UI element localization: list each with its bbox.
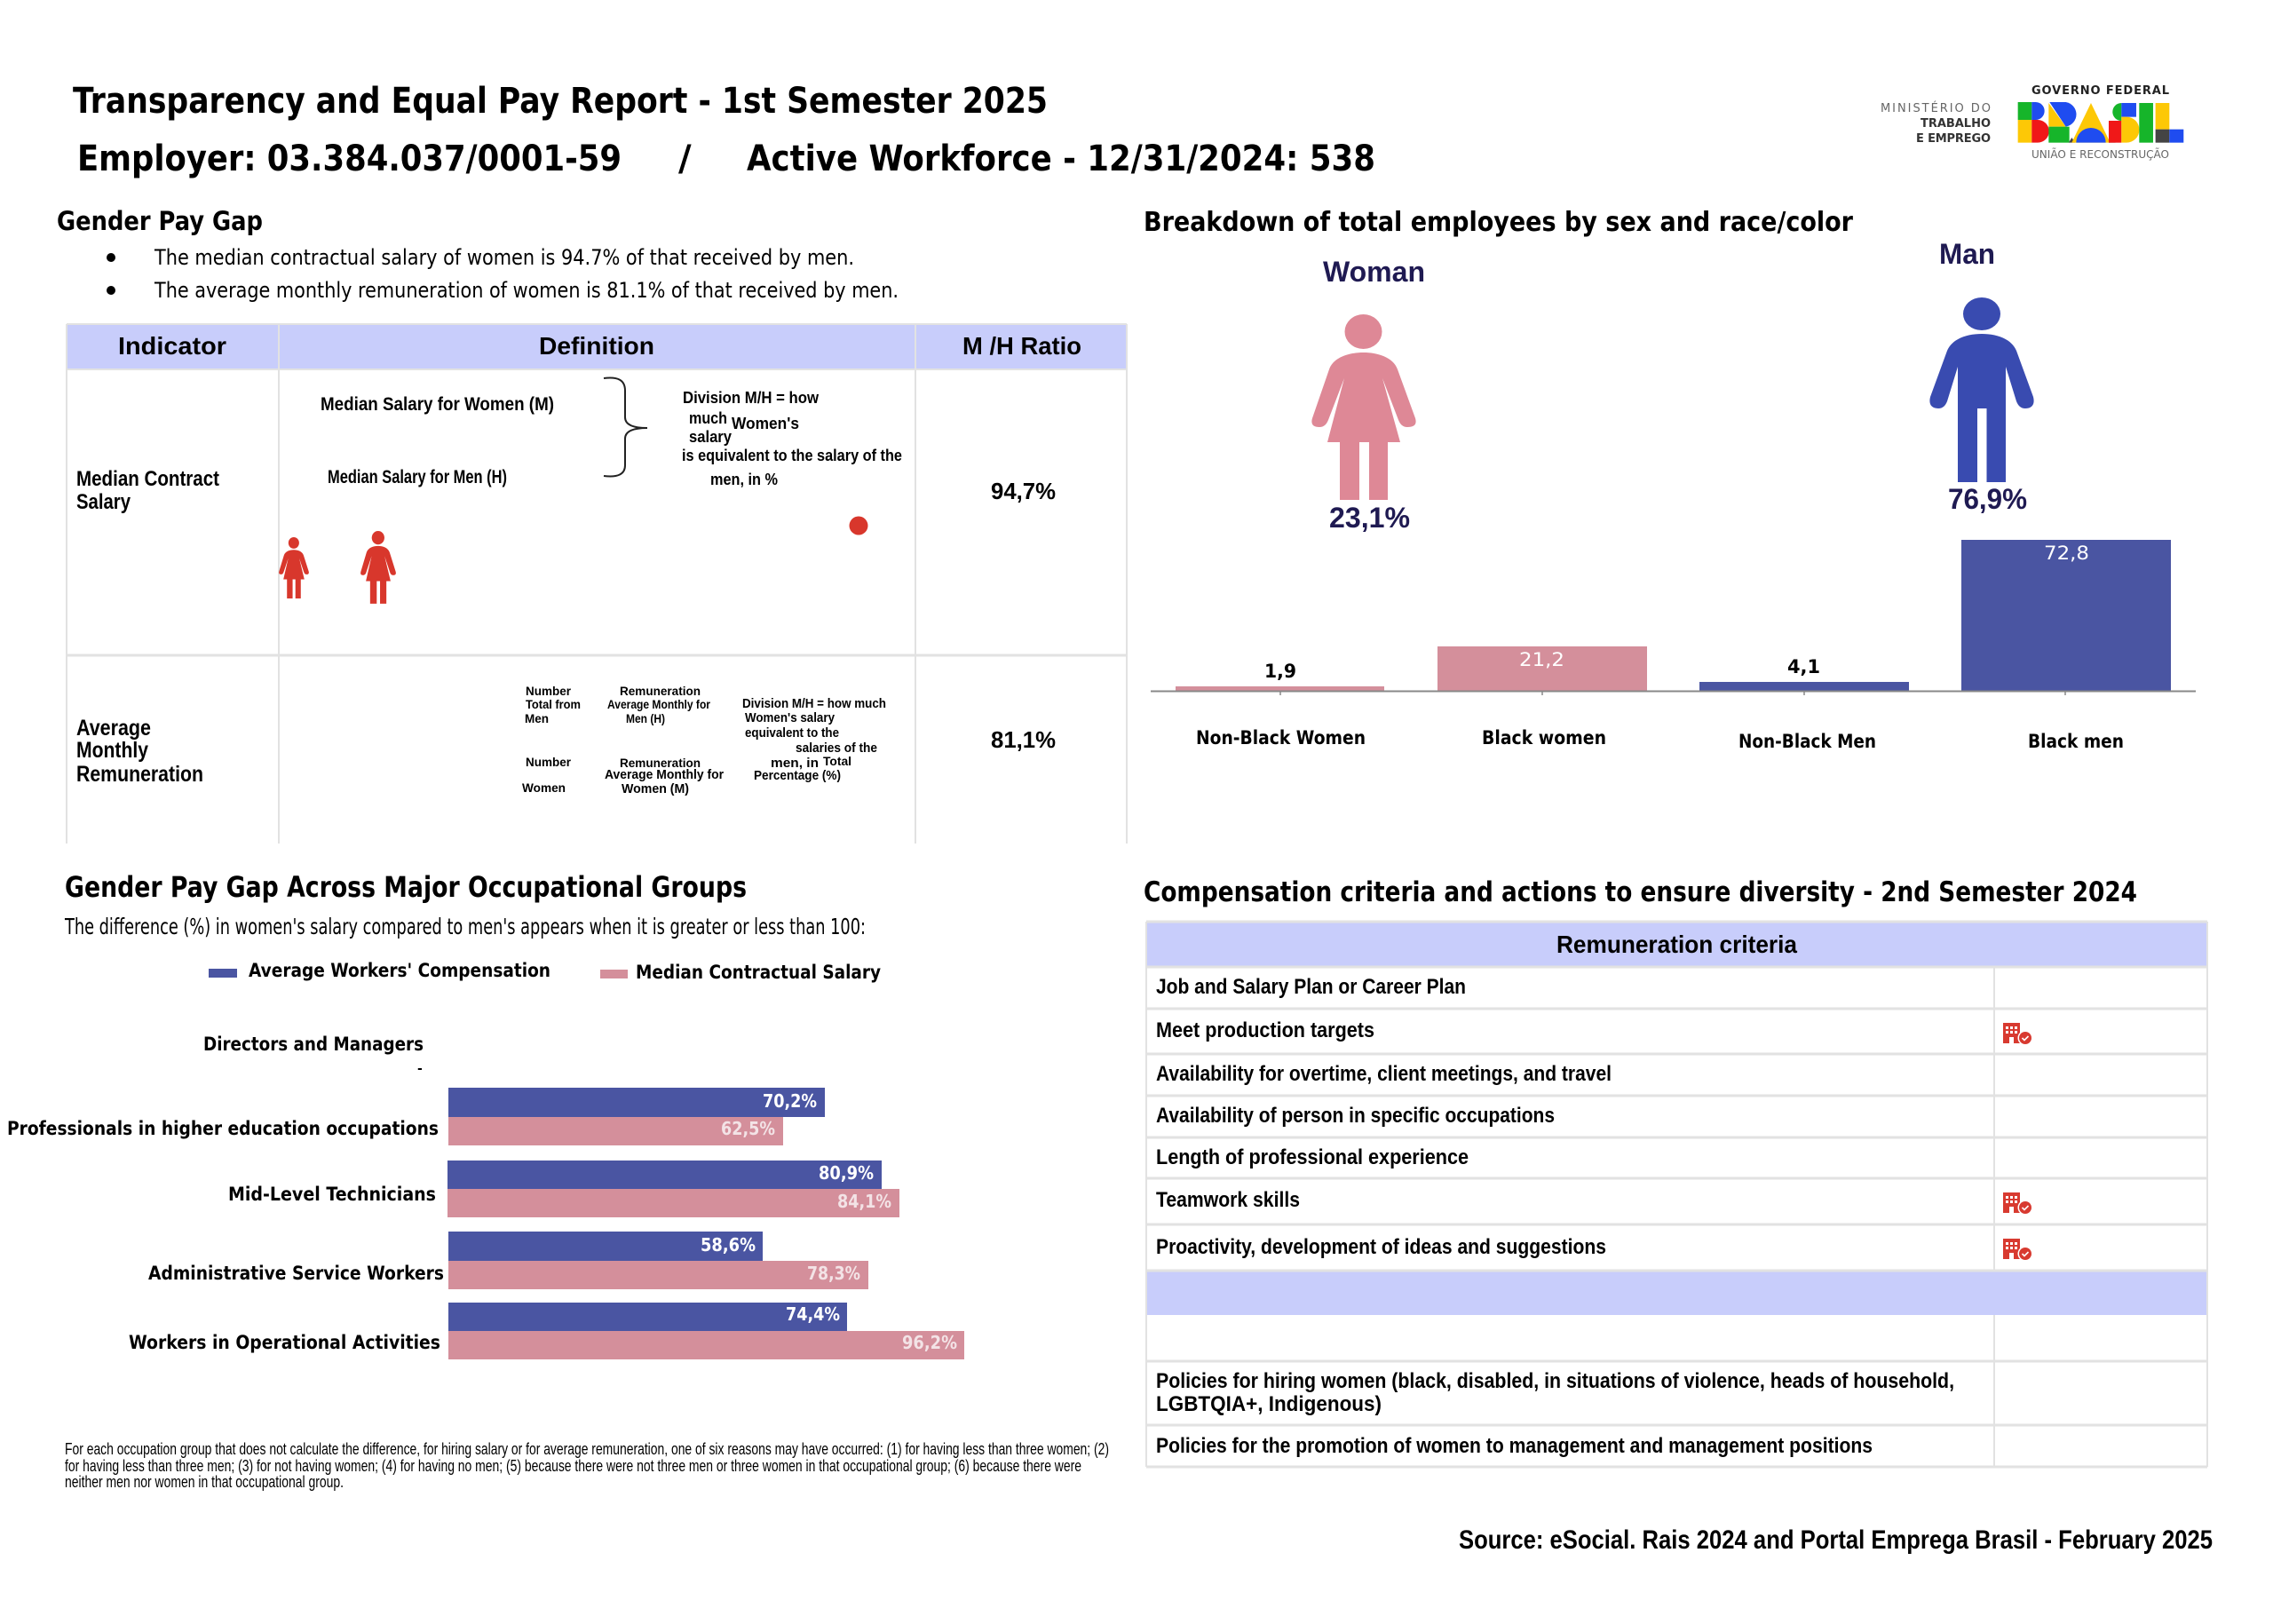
table header labels: M /H Ratio [962,332,1081,360]
table header labels [118,332,1081,360]
division note [682,389,902,488]
report title: Employer: 03.384.037/0001-59 [77,139,622,179]
formula text: Total [823,754,851,768]
bullet list [107,245,899,303]
report title: Active Workforce - 12/31/2024: 538 [747,139,1375,179]
bar chart: employees by category: Non-Black Women [1196,727,1366,749]
criteria rows: Meet production targets [1156,1018,1374,1042]
table header label: Remuneration criteria [1556,931,1797,958]
division note: Women's [732,415,799,432]
man figure with share [1929,238,2034,515]
report title: / [678,139,692,179]
formula text: Number [526,755,572,769]
formula text: Women's salary [745,710,836,725]
bullet list: The average monthly remuneration of women is 81.1% of that received by men. [154,278,899,303]
footnote [65,1439,1109,1491]
bar chart: employees by category: Non-Black Men [1738,731,1876,752]
icon: building check, production targets [2003,1023,2033,1046]
icon: red dot [849,517,868,535]
panel: pay gap by occupational group [7,870,1109,1491]
division note: salary [689,428,732,446]
subheading: The difference (%) in women's salary compared to men's appears when it is greater or less than 100: [64,914,866,939]
woman figure with share: Woman [1323,256,1425,288]
division note: Division M/H = how [683,389,820,407]
criteria rows: Length of professional experience [1156,1145,1469,1169]
group: professionals: Professionals in higher education occupations [7,1118,439,1139]
table header labels: Indicator [118,332,226,360]
row: average monthly remuneration: Remuneration [76,762,203,787]
formula text: Average Monthly for [605,767,724,782]
panel: gender pay gap [57,206,1127,844]
ministry and government logo: E EMPREGO [1916,132,1991,146]
man figure with share: Man [1939,238,1995,270]
criteria rows: Policies for the promotion of women to management and management positions [1156,1434,1873,1458]
legend [209,960,881,983]
group: professionals: 70,2% [763,1090,817,1112]
group: operational [129,1303,964,1359]
group: operational: Workers in Operational Activities [129,1332,440,1353]
icon: building check, proactivity [2003,1239,2033,1261]
group: technicians [228,1161,899,1217]
ministry and government logo [1881,84,2183,161]
criteria rows: Job and Salary Plan or Career Plan [1156,975,1466,999]
panel: compensation criteria [1144,876,2207,1467]
remuneration criteria table [1146,922,2207,1467]
division note: men, in % [710,471,778,488]
division note: much [689,409,727,427]
criteria rows: LGBTQIA+, Indigenous) [1156,1392,1382,1416]
horizontal bar chart: - [417,1062,423,1076]
row: average monthly remuneration: Average [76,716,151,741]
bullet list: The median contractual salary of women is 94.7% of that received by men. [154,245,854,270]
horizontal bar chart: Directors and Managers [203,1034,424,1055]
report title [73,81,1375,179]
table header labels: Definition [539,332,654,360]
ministry and government logo: GOVERNO FEDERAL [2031,84,2169,98]
formula text: men, in [771,756,819,771]
group: professionals: 62,5% [721,1118,775,1139]
group: technicians: Mid-Level Technicians [228,1184,436,1205]
panel: breakdown by sex and race [1144,207,2196,752]
bar chart: employees by category: 1,9 [1264,661,1296,682]
horizontal bar chart [7,1034,964,1359]
row: median contract salary: Median Contract [76,467,219,491]
formula text: Women [522,780,566,795]
row: median contract salary: 94,7% [991,478,1056,504]
row: median contract salary: Salary [76,490,131,514]
formula text: Division M/H = how much [742,696,886,711]
criteria rows: Availability of person in specific occupations [1156,1104,1555,1128]
woman figure with share: 23,1% [1329,502,1410,534]
criteria rows: Availability for overtime, client meetings, and travel [1156,1062,1612,1086]
division note: is equivalent to the salary of the [682,447,902,464]
group: technicians: 84,1% [837,1191,891,1212]
icon: large woman [360,531,396,604]
group: administrative: Administrative Service Workers [148,1263,444,1284]
row: average monthly remuneration: Monthly [76,738,148,763]
bar chart: employees by category: 72,8 [2044,543,2089,564]
formula text: Remuneration [620,684,701,698]
indicator table [67,324,1127,844]
formula text [522,684,886,796]
criteria rows: Proactivity, development of ideas and suggestions [1156,1235,1606,1259]
footnote: For each occupation group that does not calculate the difference, for hiring salary or for average remuneration, one of six reasons may have occurred: (1) for having less than three women; (2) [65,1439,1109,1458]
criteria rows: Teamwork skills [1156,1188,1300,1212]
formula text: Women (M) [622,781,689,796]
legend: Median Contractual Salary [636,962,881,983]
ministry and government logo: MINISTÉRIO DO [1881,101,1991,115]
heading: breakdown: Breakdown of total employees by sex and race/color [1144,207,1853,238]
ministry and government logo: TRABALHO [1921,117,1991,131]
group: administrative: 78,3% [807,1263,860,1284]
report title: Transparency and Equal Pay Report - 1st Semester 2025 [73,81,1048,122]
group: operational: 96,2% [902,1332,957,1353]
criteria rows [1156,975,1954,1458]
man figure with share: 76,9% [1948,483,2027,515]
bar chart: employees by category [1151,540,2196,752]
group: operational: 74,4% [786,1303,840,1325]
heading: occupational groups: Gender Pay Gap Across Major Occupational Groups [65,870,747,904]
bar chart: employees by category: 21,2 [1519,649,1564,670]
icon: small woman [279,537,309,598]
legend: Average Workers' Compensation [249,960,550,981]
formula text: salaries of the [796,741,877,756]
formula text: Percentage (%) [754,768,841,783]
footnote: neither men nor women in that occupational group. [65,1472,344,1491]
formula text: Number [526,684,572,698]
icon: building check, teamwork [2003,1192,2033,1215]
row: average monthly remuneration: 81,1% [991,726,1056,753]
group: professionals [7,1088,825,1145]
ministry and government logo: UNIÃO E RECONSTRUÇÃO [2031,147,2169,161]
group: technicians: 80,9% [819,1162,874,1184]
row: median contract salary: Median Salary for Women (M) [321,394,554,415]
bar chart: employees by category: 4,1 [1787,656,1820,677]
formula text: Total from [526,697,581,711]
row: median contract salary: Median Salary for Men (H) [328,467,507,487]
woman figure with share [1311,256,1425,534]
brace [604,378,647,476]
criteria rows: Policies for hiring women (black, disabled, in situations of violence, heads of household, [1156,1369,1954,1393]
footnote: for having less than three men; (3) for not having women; (4) for having no men; (5) because there were not three men or three women in that occupational group; (6) because there were [65,1456,1081,1475]
formula text: Average Monthly for [607,697,710,711]
bar chart: employees by category: Black women [1482,727,1606,749]
row: average monthly remuneration [76,684,1056,796]
group: administrative [148,1232,868,1289]
row: median contract salary [76,378,1056,604]
formula text: equivalent to the [745,725,839,741]
heading: gender pay gap: Gender Pay Gap [57,206,263,236]
formula text: Men [525,711,549,725]
formula text: Remuneration [620,756,701,770]
group: administrative: 58,6% [701,1234,756,1256]
bar chart: employees by category: Black men [2028,731,2124,752]
formula text: Men (H) [626,711,665,725]
